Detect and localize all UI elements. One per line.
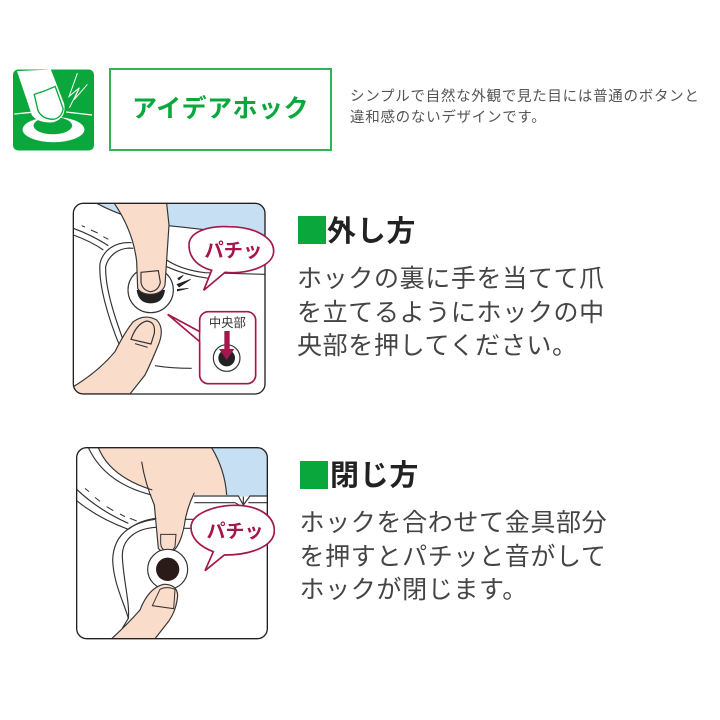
- icon: finger pressing hook: [13, 70, 94, 150]
- heading: how to close: [300, 460, 419, 492]
- body text: close: ホックが閉じます。: [300, 576, 528, 604]
- body text: unfasten: 央部を押してください。: [297, 332, 578, 360]
- speech bubble: [189, 227, 274, 290]
- lower finger: [112, 584, 178, 639]
- body text: close: ホックを合わせて金具部分: [300, 509, 607, 537]
- hook ring: [148, 549, 188, 589]
- lower finger: [73, 317, 161, 394]
- upper hand and finger: [98, 448, 227, 554]
- green square: [300, 461, 328, 489]
- heading text: 外し方: [327, 216, 416, 248]
- title box: [109, 68, 332, 151]
- heading: how to unfasten: [298, 216, 416, 248]
- description text: [350, 88, 700, 126]
- title text: アイデアホック: [132, 95, 309, 123]
- speech bubble: パチッ: [204, 240, 262, 262]
- green square: [298, 216, 326, 244]
- illustration: closing the hook: [76, 447, 275, 640]
- body text: unfasten: ホックの裏に手を当てて爪: [297, 265, 605, 293]
- speech bubble: パチッ: [206, 520, 264, 542]
- callout: center detail: 中央部: [209, 315, 246, 330]
- illustration: removing the hook: [72, 202, 274, 395]
- click marks: [177, 275, 191, 291]
- hook ring: [128, 267, 173, 313]
- description text: シンプルで自然な外観で見た目には普通のボタンと: [350, 89, 700, 105]
- body text: unfasten: を立てるようにホックの中: [297, 299, 605, 327]
- callout: center detail: [168, 312, 256, 384]
- body text: close: [300, 509, 607, 604]
- upper finger: [114, 203, 169, 294]
- body text: close: を押すとパチッと音がして: [300, 543, 607, 571]
- heading text: 閉じ方: [330, 460, 419, 492]
- body text: unfasten: [297, 265, 605, 360]
- speech bubble: [191, 505, 274, 571]
- description text: 違和感のないデザインです。: [350, 110, 546, 126]
